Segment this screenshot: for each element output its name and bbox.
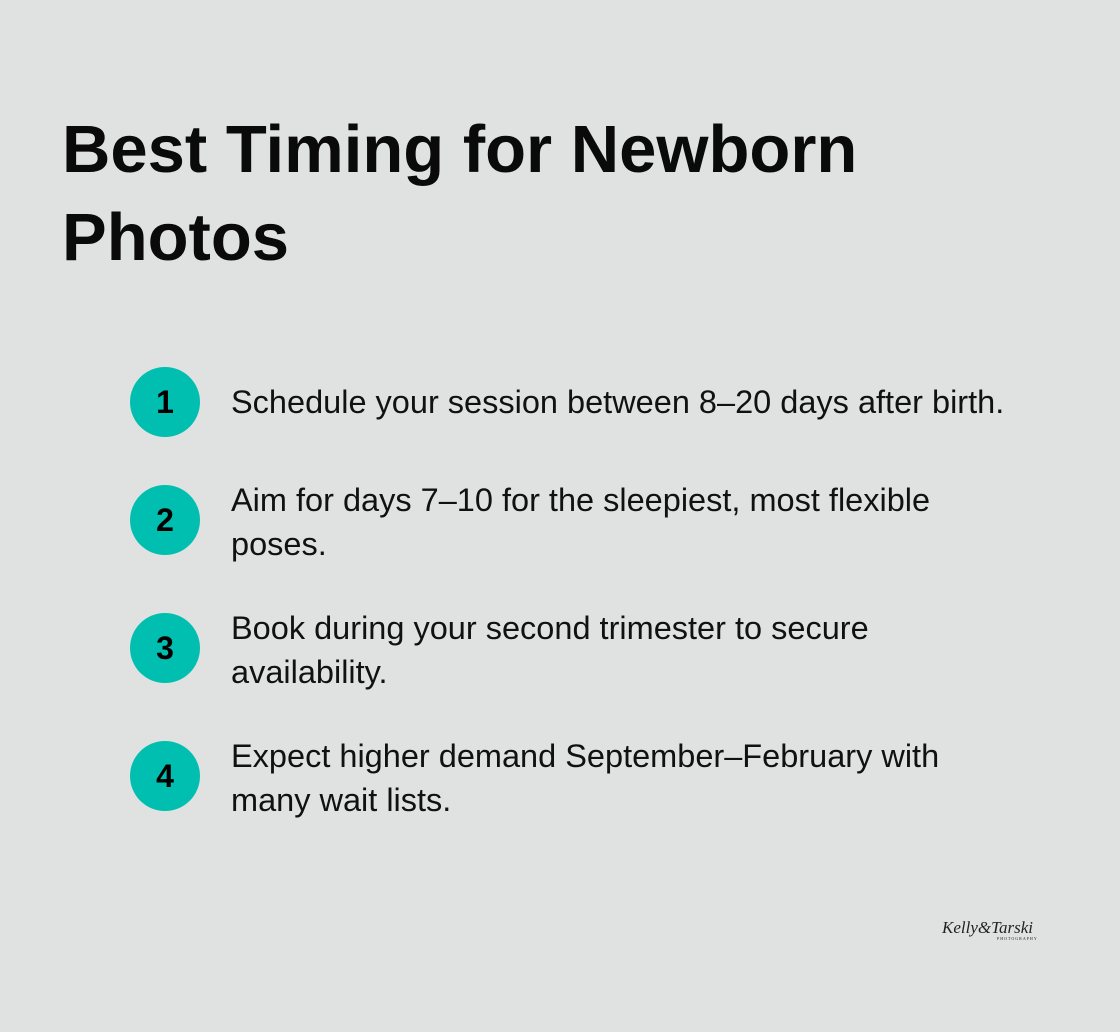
badge 2: 2 (156, 502, 174, 538)
logo: Kelly&Tarski (942, 918, 1033, 937)
text 1: Schedule your session between 8–20 days after birth. (231, 384, 1004, 420)
text 4: Expect higher demand September–February with (231, 738, 939, 774)
badge 1 (130, 367, 200, 437)
item 2 (130, 482, 930, 562)
badge 4: 4 (156, 758, 174, 794)
text 3: availability. (231, 654, 388, 690)
text 2 (231, 482, 930, 562)
title (62, 112, 857, 275)
badge 4 (130, 741, 200, 811)
item 3 (130, 610, 869, 690)
text 2: poses. (231, 526, 327, 562)
badge 3 (130, 613, 200, 683)
text 4 (231, 738, 939, 818)
logo: PHOTOGRAPHY (997, 936, 1038, 941)
text 3 (231, 610, 869, 690)
item 4 (130, 738, 939, 818)
item 1 (130, 367, 1004, 437)
title: Best Timing for Newborn (62, 112, 857, 187)
badge 2 (130, 485, 200, 555)
text 4: many wait lists. (231, 782, 451, 818)
badge 3: 3 (156, 630, 174, 666)
text 3: Book during your second trimester to secure (231, 610, 869, 646)
badge 1: 1 (156, 384, 174, 420)
text 2: Aim for days 7–10 for the sleepiest, most flexible (231, 482, 930, 518)
title: Photos (62, 200, 289, 275)
